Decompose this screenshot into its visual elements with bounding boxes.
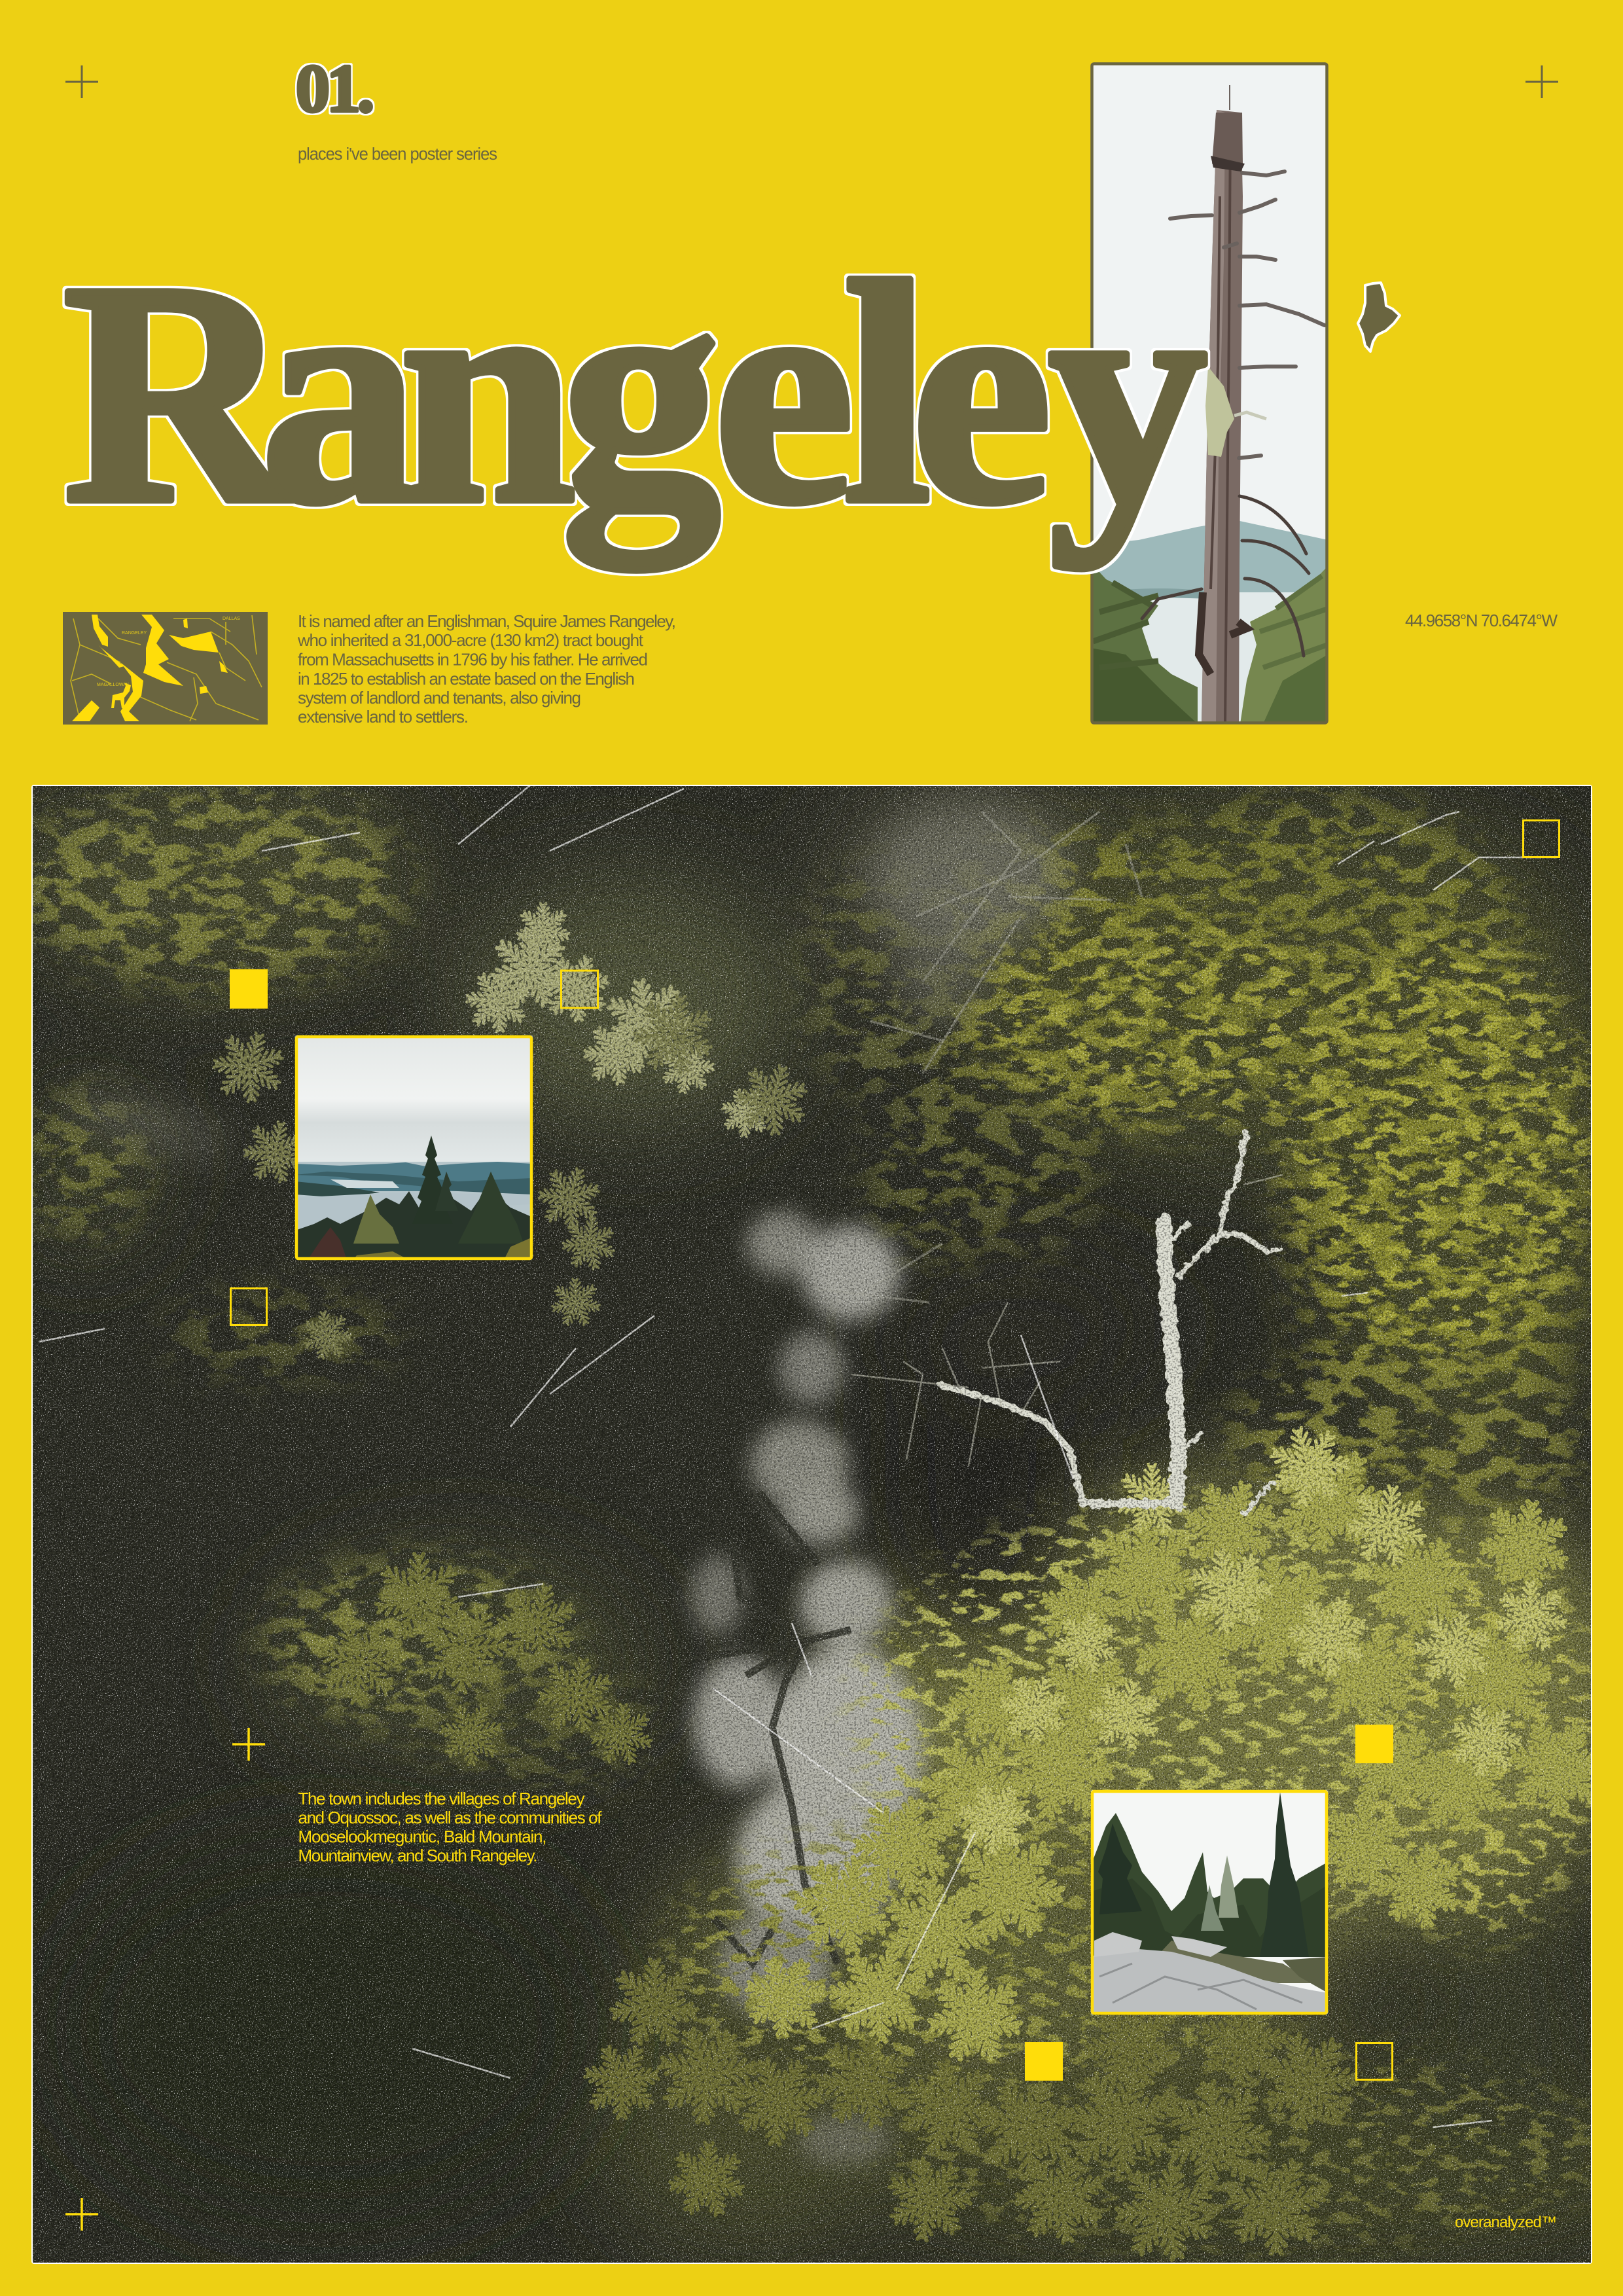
marker: outline square left — [230, 1288, 267, 1325]
marker: filled square right — [1355, 1725, 1393, 1763]
marker: filled square bottom — [1025, 2042, 1063, 2081]
history paragraph: who inherited a 31,000-acre (130 km2) tract bought — [297, 630, 644, 650]
villages paragraph: Mooselookmeguntic, Bald Mountain, — [298, 1827, 547, 1846]
villages paragraph — [298, 1789, 602, 1865]
history paragraph: in 1825 to establish an estate based on the English — [298, 669, 635, 689]
history paragraph: system of landlord and tenants, also giving — [298, 688, 581, 708]
villages paragraph: The town includes the villages of Rangeley — [298, 1789, 585, 1808]
photo: dead tree over lake — [1091, 63, 1328, 724]
granite — [1091, 1947, 1328, 2015]
far-right and lower bright foliage tone — [668, 916, 1610, 2245]
roads — [71, 615, 262, 721]
mid-tone foliage masses — [13, 785, 1584, 1787]
pale larch — [1219, 1856, 1239, 1918]
distant hills — [1091, 520, 1328, 596]
history paragraph: extensive land to settlers. — [298, 707, 469, 726]
villages paragraph: Mountainview, and South Rangeley. — [298, 1846, 538, 1865]
dark shadow beside the path — [52, 1244, 1165, 2225]
spruce tufts: left bush — [303, 1554, 664, 1777]
dust specks — [33, 786, 1591, 2263]
history paragraph: from Massachusetts in 1796 by his father. He arrived — [298, 649, 648, 669]
map of the Rangeley lakes: MAGALLOWAY — [97, 683, 129, 687]
trunk — [1202, 110, 1243, 724]
rock cracks — [694, 1492, 851, 1964]
pale lichen haze — [63, 805, 1067, 1164]
lakes — [72, 615, 228, 721]
marker: outline square bottom right — [1356, 2043, 1393, 2080]
inset photo: lake overlook — [295, 1035, 533, 1260]
series subtitle: places i've been poster series — [298, 145, 497, 164]
dead white branch — [941, 1133, 1280, 1513]
title: Rangeley — [63, 217, 1207, 575]
icon: crosshair in panel — [232, 1728, 265, 1761]
central spruces — [412, 1136, 453, 1224]
icon: crosshair bottom left — [65, 2198, 98, 2231]
spruce tufts: bottom dim canopy — [572, 1960, 1376, 2280]
rock path — [691, 1212, 923, 2166]
hanging moss — [1205, 367, 1234, 457]
marker: outline square top — [562, 971, 598, 1008]
spruce tufts: pale tree upper left — [458, 903, 779, 1145]
distant hills — [295, 1162, 533, 1191]
panel: main forest photograph — [7, 766, 1623, 2280]
marker: filled square top left — [230, 969, 268, 1009]
film scratches — [39, 785, 1558, 2127]
right conifers — [1240, 566, 1328, 724]
background treeline — [1091, 1813, 1328, 1957]
moose — [111, 683, 131, 708]
marker: outline square top right — [1524, 821, 1559, 857]
wordmark: overanalyzed™ — [1455, 2214, 1557, 2231]
icon: crosshair top right — [1525, 65, 1558, 98]
left spruce — [1098, 1823, 1142, 1914]
tall spruce — [1260, 1792, 1309, 1957]
fine dead twigs — [851, 1175, 1283, 1466]
map of the Rangeley lakes — [63, 612, 268, 725]
spruce tufts: lower right canopy — [732, 1435, 1622, 2081]
coordinates: 44.9658°N 70.6474°W — [1405, 611, 1558, 630]
villages paragraph: and Oquossoc, as well as the communities of — [298, 1808, 602, 1827]
icon: Maine state silhouette — [1358, 283, 1400, 351]
inset photo: granite ledge and spruces — [1091, 1790, 1328, 2015]
lower forest — [295, 1188, 533, 1260]
issue number: 01. — [296, 51, 372, 126]
map labels: RANGELEY — [122, 631, 147, 636]
history paragraph — [297, 611, 676, 726]
icon: crosshair top left — [65, 65, 98, 98]
history paragraph: It is named after an Englishman, Squire James Rangeley, — [298, 611, 676, 631]
left conifers — [1091, 563, 1198, 724]
branches — [1170, 171, 1325, 458]
map of the Rangeley lakes: DALLAS — [223, 617, 240, 621]
branch network upper centre — [818, 812, 1142, 1302]
shrubs — [1155, 1941, 1315, 1983]
broad tonal field — [7, 766, 1623, 2271]
